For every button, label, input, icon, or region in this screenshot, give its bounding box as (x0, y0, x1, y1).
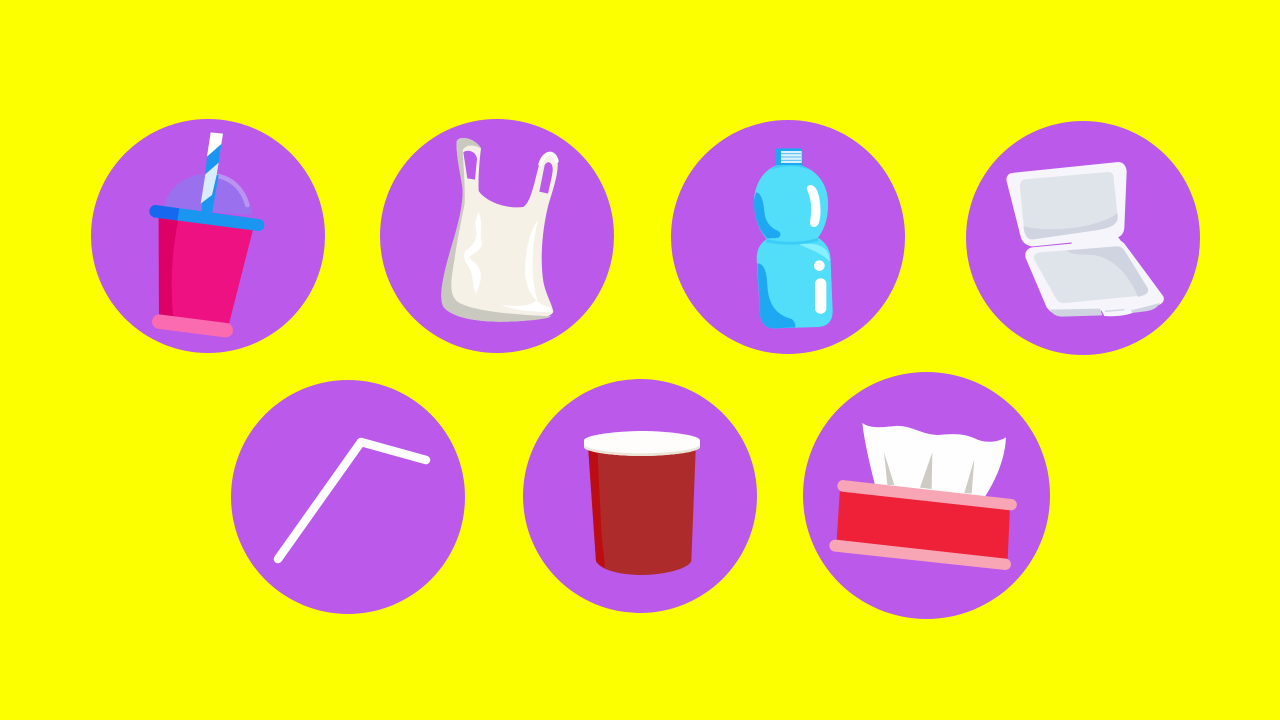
icon: plastic carrier bag (380, 119, 614, 353)
icon: bendy drinking straw (231, 380, 465, 614)
icon: red paper cup with lid (523, 379, 757, 613)
icon: tissue box (803, 372, 1050, 619)
icon: plastic smoothie cup (91, 119, 325, 353)
icon: water bottle (671, 120, 905, 354)
icon: foam takeaway box (966, 121, 1200, 355)
